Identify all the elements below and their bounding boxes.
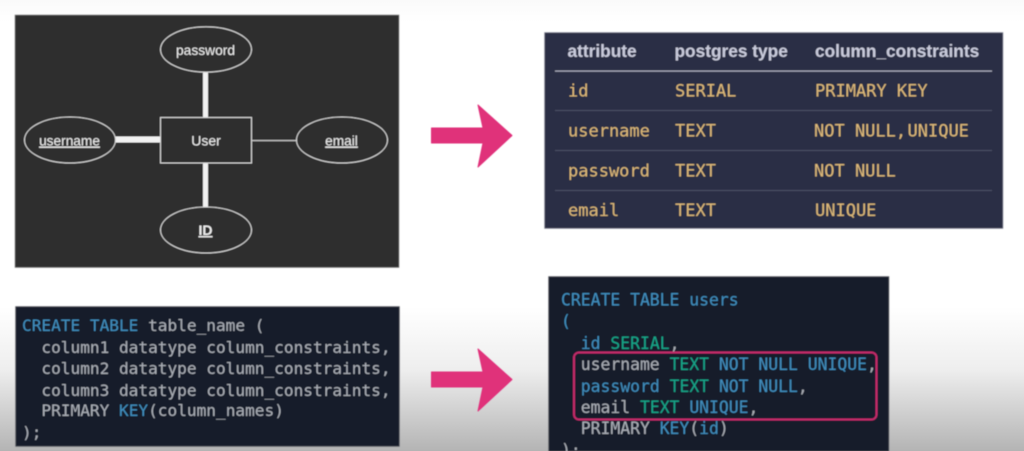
code: template: column2 datatype column_constraints, [22,359,391,378]
table row: id [568,82,928,102]
table row: username: username [568,122,650,142]
table row: password: NOT NULL [814,162,896,182]
table row: password [568,162,896,182]
panel: CREATE TABLE template [16,306,400,446]
table row: username [568,122,969,142]
panel: attribute table [544,32,1003,228]
code: template [22,316,391,442]
arrow: template to users table [432,349,512,411]
table header: column_constraints [815,41,979,61]
entity: User: User [191,132,221,148]
table row: password: TEXT [675,162,716,182]
attribute: username [24,117,116,163]
table header: attribute [568,41,637,61]
table row: id: PRIMARY KEY [815,82,928,102]
table row: email: UNIQUE [815,201,876,221]
code: template: ); [22,423,41,442]
code: template: PRIMARY KEY(column_names) [22,401,284,420]
table row: id: SERIAL [675,82,736,102]
code: users: password TEXT NOT NULL, [561,377,808,396]
connector: username to User [115,136,161,142]
code: template: column1 datatype column_constraints, [22,338,391,357]
table header: postgres type [674,41,788,61]
attribute: password [160,27,252,72]
code: template: CREATE TABLE table_name ( [22,316,264,335]
table row: username: NOT NULL, [814,122,906,142]
table row: email [568,201,876,221]
table row: username: UNIQUE [908,122,969,142]
entity: User [160,118,252,163]
table row: email: TEXT [675,201,716,221]
table row: id: id [568,82,588,102]
code: template: column3 datatype column_constraints, [22,381,391,400]
attribute: email [296,117,388,163]
code: users: CREATE TABLE users [561,290,739,310]
table row: password: password [568,162,650,182]
panel: CREATE TABLE users [548,276,889,451]
panel: ER diagram [15,15,399,268]
attribute: username: username [39,134,100,148]
attribute: password: password [176,43,235,58]
arrow: diagram to table [432,105,512,167]
table row: username: TEXT [675,122,716,142]
connector: User to email [251,140,297,141]
code: users: username TEXT NOT NULL UNIQUE, [561,355,877,374]
code: users [561,290,877,451]
attribute: email: email [325,134,358,148]
connector: User to ID [203,163,208,208]
table row: email: email [568,201,619,221]
code: users: id SERIAL, [561,334,679,353]
highlight box [574,352,876,420]
code: users: email TEXT UNIQUE, [561,398,758,417]
code: users: PRIMARY KEY(id) [561,419,729,438]
connector: password to User [203,72,208,118]
table header [568,41,979,61]
attribute: ID [160,207,252,253]
attribute: ID: ID [198,222,212,238]
code: users: ( [561,312,571,331]
